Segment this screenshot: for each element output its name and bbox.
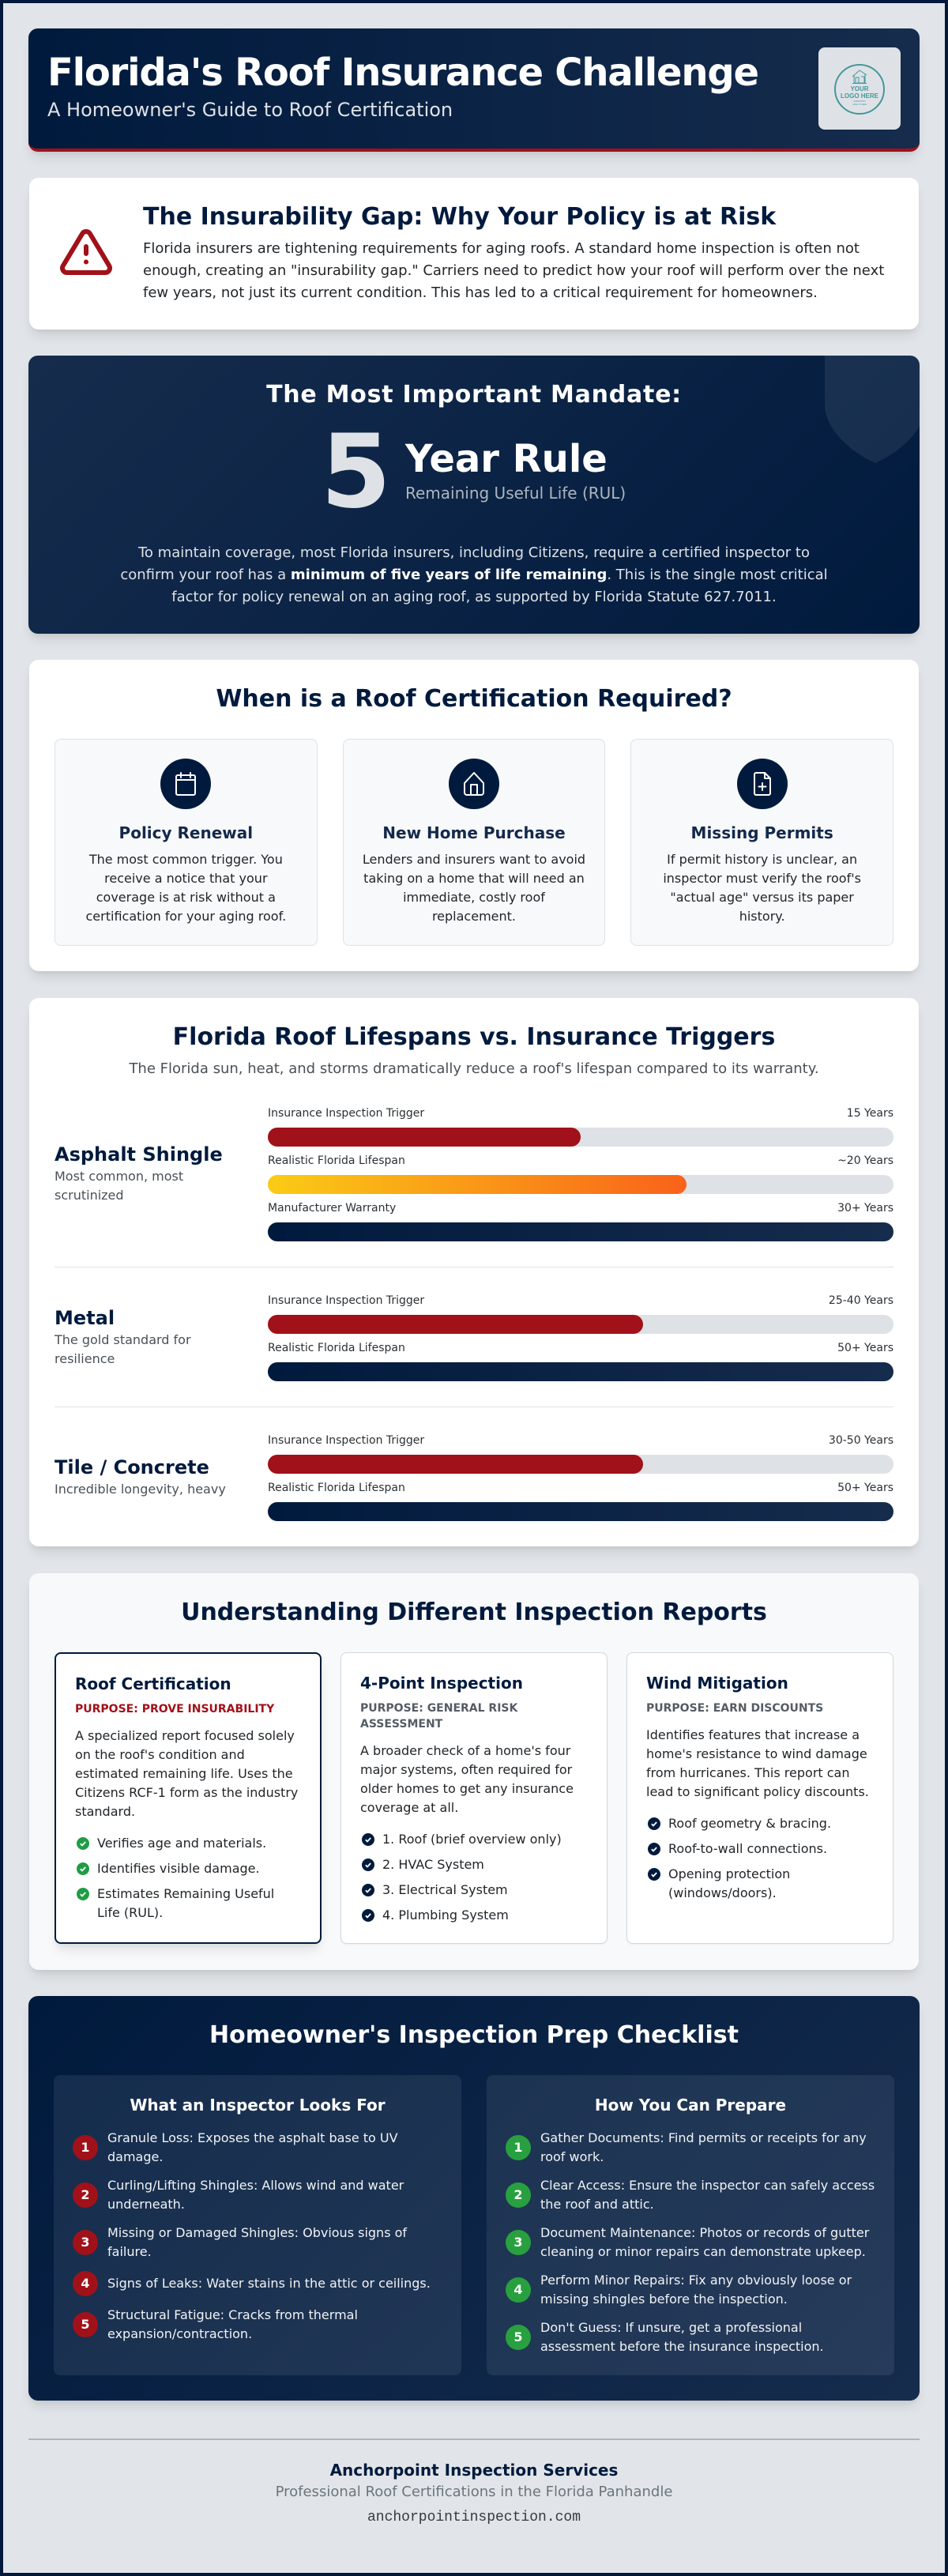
checklist: Estimates Remaining Useful — [97, 1886, 274, 1901]
numbered list — [506, 2130, 875, 2354]
body text: Florida insurers are tightening requirements for aging roofs. A standard home inspection is often not — [143, 240, 860, 257]
bar chart: asphalt shingle: Asphalt Shingle — [55, 1143, 223, 1166]
bar chart: tile and concrete: Incredible longevity, heavy — [55, 1482, 226, 1497]
card text: history. — [739, 909, 785, 924]
body text: To maintain coverage, most Florida insurers, including Citizens, require a certified inspector to — [138, 544, 810, 561]
bar chart: tile and concrete: 50+ Years — [837, 1482, 893, 1494]
icon: house — [449, 759, 499, 809]
card text — [646, 1727, 869, 1799]
subheading: The Florida sun, heat, and storms dramatically reduce a roof's lifespan compared to its warranty. — [129, 1060, 819, 1077]
card text — [663, 852, 861, 924]
card text: coverage is at risk without a — [96, 890, 276, 905]
panel: insurability gap — [29, 178, 919, 330]
numbered list: 4 — [81, 2276, 90, 2291]
title: Florida's Roof Insurance Challenge — [47, 51, 758, 95]
card title: Policy Renewal — [119, 823, 253, 842]
checklist: Life (RUL). — [97, 1905, 163, 1920]
card text: on the roof's condition and — [75, 1747, 245, 1762]
checklist: 2. HVAC System — [382, 1857, 484, 1872]
bar chart: asphalt shingle: Most common, most — [55, 1169, 183, 1184]
panel: prep checklist — [28, 1996, 920, 2401]
bar chart: tile and concrete: Insurance Inspection Trigger — [268, 1434, 424, 1447]
checklist: 4. Plumbing System — [382, 1908, 509, 1923]
numbered list: 3 — [514, 2235, 523, 2250]
card text: Lenders and insurers want to avoid — [363, 852, 585, 867]
icon: warning triangle — [60, 229, 112, 275]
heading: The Most Important Mandate: — [266, 381, 682, 409]
heading: Homeowner's Inspection Prep Checklist — [209, 2021, 739, 2049]
checklist — [362, 1832, 562, 1923]
bar chart: metal: The gold standard for — [55, 1332, 191, 1347]
card text: inspector must verify the roof's — [663, 871, 861, 886]
numbered list: 1 — [81, 2140, 90, 2155]
bar chart: metal: resilience — [55, 1351, 115, 1366]
card text: lead to significant policy discounts. — [646, 1784, 869, 1799]
bar chart: metal: 50+ Years — [837, 1342, 893, 1354]
logo placeholder: GOES IN HERE — [852, 104, 867, 106]
heading: Understanding Different Inspection Reports — [181, 1599, 767, 1626]
bar chart: metal: Metal — [55, 1307, 115, 1329]
card: missing permits — [630, 739, 893, 946]
header banner — [28, 28, 920, 152]
big number: 5 — [321, 413, 391, 531]
card title: Wind Mitigation — [646, 1674, 788, 1693]
bar chart: asphalt shingle: Insurance Inspection Trigger — [268, 1107, 424, 1120]
card text: certification for your aging roof. — [85, 909, 286, 924]
card text: older homes to get any insurance — [360, 1781, 574, 1796]
card text: Identifies features that increase a — [646, 1727, 860, 1742]
card text: A specialized report focused solely — [75, 1728, 295, 1743]
card text: estimated remaining life. Uses the — [75, 1766, 293, 1781]
numbered list: roof work. — [540, 2149, 604, 2164]
numbered list: damage. — [107, 2149, 163, 2164]
panel: when certification is required — [29, 660, 919, 971]
numbered list: Document Maintenance: Photos or records of gutter — [540, 2225, 869, 2240]
purpose tag: ASSESSMENT — [360, 1718, 442, 1731]
checklist: Roof geometry & bracing. — [668, 1816, 831, 1831]
bar chart: metal — [55, 1293, 893, 1407]
numbered list: 5 — [81, 2317, 90, 2332]
purpose tag: PURPOSE: GENERAL RISK — [360, 1702, 517, 1715]
numbered list: Curling/Lifting Shingles: Allows wind and water — [107, 2178, 404, 2193]
card title: 4-Point Inspection — [360, 1674, 523, 1693]
company name: Anchorpoint Inspection Services — [330, 2461, 618, 2480]
numbered list — [73, 2130, 431, 2341]
card text: replacement. — [432, 909, 516, 924]
card: roof certification — [55, 1652, 322, 1944]
card text — [85, 852, 286, 924]
card text: If permit history is unclear, an — [667, 852, 857, 867]
panel: roof lifespans chart — [29, 998, 919, 1546]
numbered list: the roof and attic. — [540, 2197, 654, 2212]
card text: major systems, often required for — [360, 1762, 572, 1777]
bar chart: asphalt shingle: Realistic Florida Lifespan — [268, 1154, 405, 1167]
card text: "actual age" versus its paper — [670, 890, 854, 905]
year rule label: Year Rule — [405, 437, 608, 481]
bar chart: asphalt shingle: Manufacturer Warranty — [268, 1202, 396, 1215]
panel: what an inspector looks for — [54, 2075, 461, 2375]
card: wind mitigation — [626, 1652, 893, 1944]
icon: file plus — [737, 759, 788, 809]
numbered list: 4 — [514, 2282, 523, 2297]
heading: Florida Roof Lifespans vs. Insurance Triggers — [173, 1023, 775, 1051]
card title: New Home Purchase — [382, 823, 566, 842]
panel heading: How You Can Prepare — [595, 2096, 786, 2115]
remaining useful life label: Remaining Useful Life (RUL) — [405, 484, 626, 503]
icon: background shield — [825, 356, 920, 463]
panel heading: What an Inspector Looks For — [130, 2096, 386, 2115]
heading: When is a Roof Certification Required? — [216, 685, 732, 713]
numbered list: 3 — [81, 2235, 90, 2250]
card text: receive a notice that your — [104, 871, 268, 886]
numbered list: Structural Fatigue: Cracks from thermal — [107, 2307, 358, 2322]
heading: The Insurability Gap: Why Your Policy is at Risk — [143, 203, 776, 231]
card text: A broader check of a home's four — [360, 1743, 570, 1758]
bar chart: tile and concrete: 30-50 Years — [829, 1434, 893, 1447]
card text — [75, 1728, 298, 1819]
card text — [363, 852, 585, 924]
checklist: Roof-to-wall connections. — [668, 1841, 827, 1856]
numbered list: Perform Minor Repairs: Fix any obviously loose or — [540, 2273, 852, 2288]
card text: taking on a home that will need an — [363, 871, 585, 886]
logo placeholder: SOMETHING — [853, 100, 866, 103]
numbered list: 2 — [514, 2187, 523, 2202]
purpose tag: PURPOSE: PROVE INSURABILITY — [75, 1703, 274, 1715]
numbered list: Clear Access: Ensure the inspector can safely access — [540, 2178, 875, 2193]
bar chart: asphalt shingle: ~20 Years — [837, 1154, 893, 1167]
card: new home purchase — [343, 739, 605, 946]
numbered list: Missing or Damaged Shingles: Obvious signs of — [107, 2225, 407, 2240]
checklist — [77, 1836, 274, 1920]
body text: few years, not just its current condition. This has led to a critical requirement for homeowners. — [143, 284, 818, 301]
card text: coverage at all. — [360, 1800, 458, 1815]
checklist: (windows/doors). — [668, 1885, 777, 1900]
bar chart: tile and concrete: Tile / Concrete — [55, 1456, 209, 1478]
numbered list: cleaning or minor repairs can demonstrate upkeep. — [540, 2244, 866, 2259]
numbered list: Gather Documents: Find permits or receipts for any — [540, 2130, 867, 2145]
card text: standard. — [75, 1804, 135, 1819]
bar chart: asphalt shingle — [55, 1105, 893, 1267]
numbered list: expansion/contraction. — [107, 2326, 252, 2341]
card: policy renewal — [55, 739, 318, 946]
numbered list: 2 — [81, 2187, 90, 2202]
purpose tag: PURPOSE: EARN DISCOUNTS — [646, 1702, 823, 1715]
bar chart: tile and concrete — [55, 1434, 893, 1521]
bar chart: metal: 25-40 Years — [829, 1294, 893, 1307]
card text: from hurricanes. This report can — [646, 1765, 850, 1780]
logo placeholder — [818, 47, 901, 130]
card: 4-point inspection — [340, 1652, 608, 1944]
numbered list: failure. — [107, 2244, 152, 2259]
body text — [143, 240, 884, 301]
bar chart: asphalt shingle: 15 Years — [847, 1107, 893, 1120]
body text: enough, creating an "insurability gap." Carriers need to predict how your roof will perform over the next — [143, 262, 884, 279]
numbered list: Don't Guess: If unsure, get a professional — [540, 2320, 802, 2335]
checklist — [648, 1816, 831, 1900]
checklist: Verifies age and materials. — [97, 1836, 266, 1851]
bar chart: asphalt shingle: 30+ Years — [837, 1202, 893, 1215]
numbered list: Signs of Leaks: Water stains in the attic or ceilings. — [107, 2276, 431, 2291]
card title: Roof Certification — [75, 1674, 231, 1693]
card text: immediate, costly roof — [403, 890, 545, 905]
card text: home's resistance to wind damage — [646, 1746, 867, 1761]
checklist: 3. Electrical System — [382, 1882, 508, 1897]
panel: inspection reports — [29, 1573, 919, 1970]
panel: five year mandate — [28, 356, 920, 634]
logo placeholder: YOUR — [850, 85, 869, 92]
panel: how you can prepare — [487, 2075, 894, 2375]
logo placeholder: LOGO HERE — [841, 92, 879, 100]
website: anchorpointinspection.com — [367, 2510, 581, 2525]
bar chart: metal: Insurance Inspection Trigger — [268, 1294, 424, 1307]
subtitle: A Homeowner's Guide to Roof Certification — [47, 99, 453, 121]
numbered list: underneath. — [107, 2197, 185, 2212]
checklist: Opening protection — [668, 1866, 790, 1881]
card text: Citizens RCF-1 form as the industry — [75, 1785, 298, 1800]
body text: confirm your roof has a minimum of five years of life remaining. This is the single most critical — [120, 567, 828, 583]
tagline: Professional Roof Certifications in the Florida Panhandle — [276, 2484, 672, 2500]
numbered list: assessment before the insurance inspection. — [540, 2339, 824, 2354]
footer — [28, 2439, 920, 2541]
checklist: Identifies visible damage. — [97, 1861, 260, 1876]
body text — [120, 544, 828, 605]
checklist: 1. Roof (brief overview only) — [382, 1832, 562, 1847]
body text: factor for policy renewal on an aging roof, as supported by Florida Statute 627.7011. — [171, 589, 777, 605]
bar chart: asphalt shingle: scrutinized — [55, 1188, 124, 1203]
purpose tag — [360, 1702, 518, 1731]
card text — [360, 1743, 574, 1815]
numbered list: 1 — [514, 2140, 523, 2155]
bar chart: tile and concrete: Realistic Florida Lifespan — [268, 1482, 405, 1494]
card text: The most common trigger. You — [89, 852, 283, 867]
card title: Missing Permits — [691, 823, 833, 842]
icon: calendar — [160, 759, 211, 809]
bar chart: metal: Realistic Florida Lifespan — [268, 1342, 405, 1354]
numbered list: Granule Loss: Exposes the asphalt base to UV — [107, 2130, 398, 2145]
numbered list: missing shingles before the inspection. — [540, 2292, 788, 2307]
numbered list: 5 — [514, 2329, 523, 2344]
